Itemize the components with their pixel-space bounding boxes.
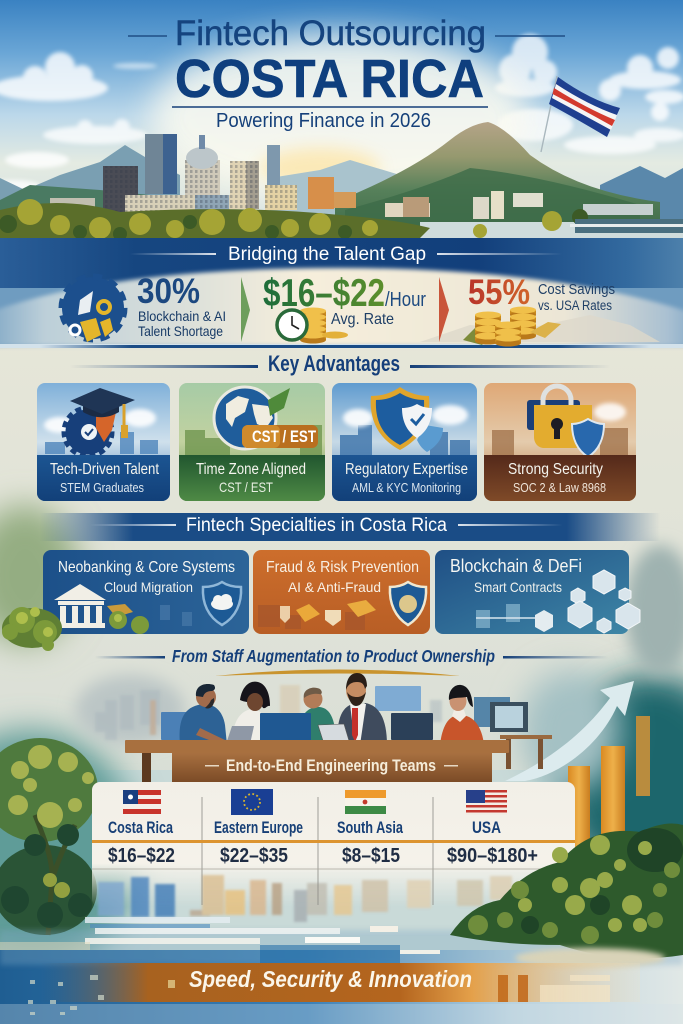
foliage xyxy=(0,199,683,241)
stat: 30 percent talent shortage xyxy=(137,272,226,339)
card: regulatory expertise: AML & KYC Monitoring xyxy=(352,480,461,495)
card: blockchain and defi: Blockchain & DeFi xyxy=(450,556,582,576)
tree: left foliage xyxy=(2,607,149,651)
flag: costa rica xyxy=(123,790,161,815)
label: end-to-end engineering teams: End-to-End Engineering Teams xyxy=(226,757,436,775)
column: south asia: $8–$15 xyxy=(342,845,400,867)
stat: hourly rate: Avg. Rate xyxy=(331,311,394,328)
heading: fintech specialties xyxy=(40,513,660,541)
heading: fintech specialties: Fintech Specialties in Costa Rica xyxy=(186,515,447,536)
card: time zone aligned xyxy=(179,383,325,501)
stat: cost savings: Cost Savings xyxy=(538,282,615,298)
distant mountains xyxy=(0,145,180,225)
arrow: green chevron xyxy=(241,277,250,342)
monitors and laptops on desk xyxy=(226,713,433,746)
card: blockchain and defi: Smart Contracts xyxy=(474,579,562,595)
card: tech-driven talent xyxy=(37,383,170,501)
flag: usa xyxy=(466,790,507,815)
person: man in blue xyxy=(180,684,227,745)
icon: cloud shield xyxy=(203,582,241,625)
card: strong security: SOC 2 & Law 8968 xyxy=(513,480,606,495)
table: hourly rate comparison xyxy=(92,782,575,922)
stat: hourly rate: $16–$22 xyxy=(263,272,385,315)
column: usa xyxy=(447,790,538,867)
city skyline xyxy=(50,134,653,219)
stat: cost savings xyxy=(468,273,615,313)
panel: bridging the talent gap xyxy=(0,238,683,348)
heading: key advantages: Key Advantages xyxy=(268,351,400,376)
stat: cost savings: 55% xyxy=(468,273,530,312)
column: south asia: South Asia xyxy=(337,818,403,837)
arrow: red chevron xyxy=(439,277,449,342)
water streaks xyxy=(0,917,683,965)
card: neobanking: Cloud Migration xyxy=(104,579,193,595)
stat: cost savings: vs. USA Rates xyxy=(538,298,612,313)
card: tech-driven talent: STEM Graduates xyxy=(60,480,144,495)
title: Powering Finance in 2026 xyxy=(216,110,431,132)
card: time zone aligned: Time Zone Aligned xyxy=(196,461,306,478)
column: costa rica: Costa Rica xyxy=(108,818,173,837)
tree: left large tree xyxy=(0,738,98,935)
person: woman with dark hair xyxy=(232,682,270,745)
stat: 30 percent talent shortage: Talent Shortage xyxy=(138,323,223,339)
card: blockchain and defi xyxy=(435,550,640,634)
icon: gear with tools xyxy=(62,277,124,342)
stat: hourly rate: /Hour xyxy=(385,289,426,311)
icon: clock and coins xyxy=(277,308,348,344)
card: fraud and risk: AI & Anti-Fraud xyxy=(288,579,381,595)
sky glow xyxy=(150,33,530,203)
person: man in green xyxy=(298,688,336,745)
column: south asia xyxy=(337,790,403,867)
stat: 30 percent talent shortage: 30% xyxy=(137,272,200,311)
card: strong security: Strong Security xyxy=(508,461,603,478)
panel: fintech specialties xyxy=(2,513,660,651)
icon: fraud tokens xyxy=(280,600,376,626)
clouds xyxy=(0,34,683,192)
heading: from staff augmentation: From Staff Augmentation to Product Ownership xyxy=(172,646,495,666)
column: costa rica xyxy=(108,790,175,867)
card: time zone aligned: CST / EST xyxy=(219,479,273,495)
panel: staff augmentation to product ownership xyxy=(95,646,650,852)
volcano xyxy=(335,122,660,236)
person: woman in orange xyxy=(440,685,484,745)
heading: from staff augmentation xyxy=(95,646,608,676)
card: neobanking: Neobanking & Core Systems xyxy=(58,559,235,576)
heading: key advantages xyxy=(70,351,610,376)
heading: bridging the talent gap: Bridging the Talent Gap xyxy=(228,244,426,265)
column: eastern europe: $22–$35 xyxy=(220,845,288,867)
person: man in suit xyxy=(337,673,387,745)
title xyxy=(128,14,565,132)
column: usa: USA xyxy=(472,818,501,837)
card: regulatory expertise xyxy=(332,383,477,501)
banner: speed, security and innovation xyxy=(40,963,640,1002)
flag xyxy=(541,76,620,152)
icon: coin stacks and cash xyxy=(463,306,561,346)
flag: south asia xyxy=(345,790,386,814)
title: COSTA RICA xyxy=(175,49,484,109)
card: strong security xyxy=(484,383,636,501)
column: costa rica: $16–$22 xyxy=(108,845,175,867)
column: eastern europe: Eastern Europe xyxy=(214,818,303,837)
tree: right foreground foliage xyxy=(450,824,683,968)
column: eastern europe xyxy=(214,789,303,867)
icon: blockchain hexagons xyxy=(568,570,640,633)
back monitors xyxy=(161,686,552,769)
data pixels bottom left xyxy=(28,975,175,1015)
panel: key advantages xyxy=(37,351,636,501)
card: fraud and risk xyxy=(253,550,430,634)
title: Fintech Outsourcing xyxy=(175,14,486,53)
desk xyxy=(125,740,509,783)
stat: 30 percent talent shortage: Blockchain & AI xyxy=(138,308,226,324)
background skyline xyxy=(95,685,442,740)
skyline in table xyxy=(98,875,512,922)
icon: shield xyxy=(390,582,426,625)
banner: speed, security and innovation: Speed, Security & Innovation xyxy=(189,966,472,992)
card: regulatory expertise: Regulatory Expertise xyxy=(345,461,468,478)
column: usa: $90–$180+ xyxy=(447,845,538,867)
flag: european union xyxy=(231,789,273,815)
card: neobanking xyxy=(43,550,249,634)
card: fraud and risk: Fraud & Risk Prevention xyxy=(266,559,419,576)
growth arrow and gold bars xyxy=(505,681,650,852)
team at desk xyxy=(125,673,552,783)
hero scene xyxy=(0,33,683,241)
icon: bank xyxy=(54,584,106,628)
card: time zone aligned: CST / EST xyxy=(252,427,316,446)
card: tech-driven talent: Tech-Driven Talent xyxy=(50,461,160,478)
